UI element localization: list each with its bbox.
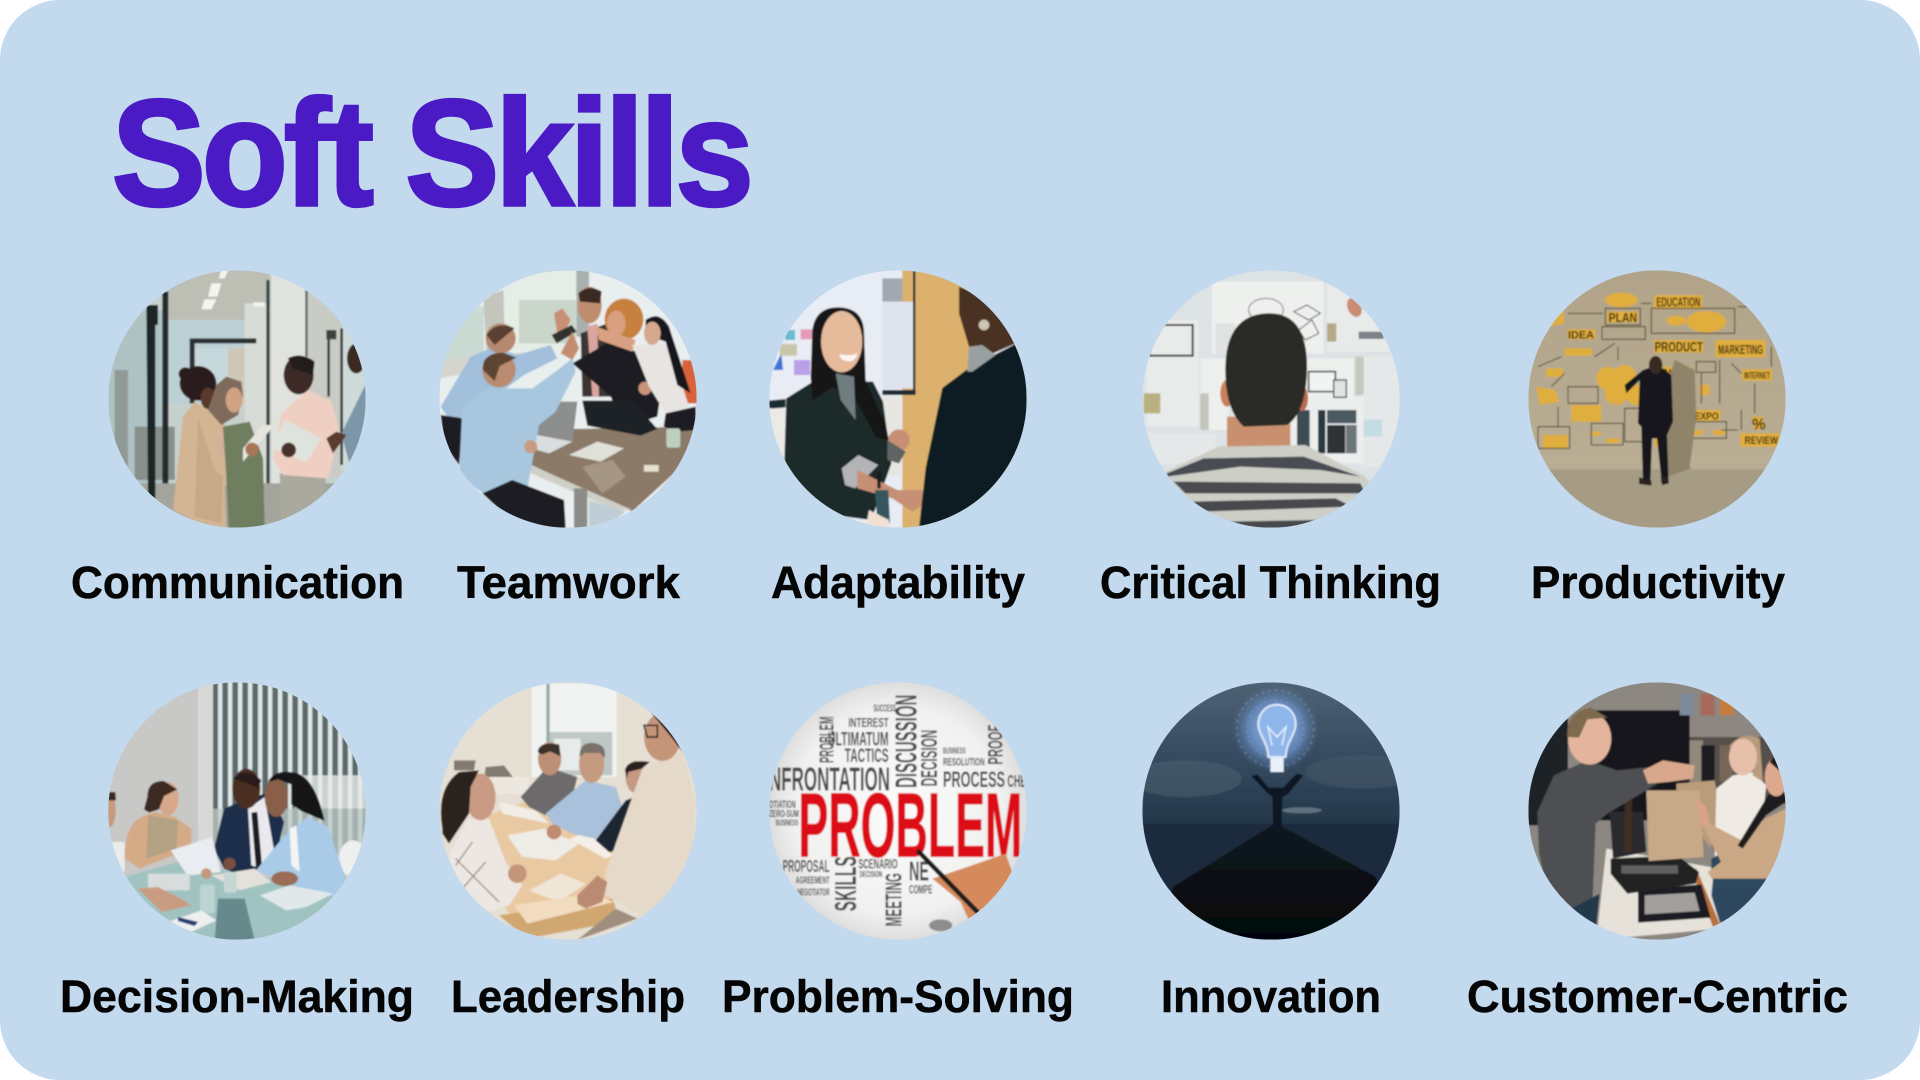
photo: word cloud around PROBLEM: RESOLUTION — [943, 756, 985, 768]
standing woman — [577, 712, 696, 940]
striped sweater — [1165, 444, 1369, 528]
photo: word cloud around PROBLEM: MEETING — [880, 873, 906, 926]
photo: man before sketched plan wall: EDUCATION — [1656, 295, 1700, 310]
photo: man before sketched plan wall: IDEA — [1568, 329, 1594, 341]
photo: word cloud around PROBLEM: NE — [909, 855, 929, 886]
photo: three colleagues at glass table — [104, 682, 367, 940]
man in blue shirt — [546, 743, 626, 840]
photo: shop assistant handing bag to customers — [1528, 682, 1788, 940]
photo: word cloud around PROBLEM: SUCCESS — [873, 703, 896, 714]
label: Innovation — [1161, 971, 1381, 1022]
photo: word cloud around PROBLEM: ZERO-SUM — [769, 809, 799, 820]
table — [516, 427, 697, 528]
photo: word cloud around PROBLEM: DECISION — [916, 730, 942, 786]
photo: word cloud around PROBLEM: NFRONTATION — [769, 761, 890, 798]
photo: word cloud around PROBLEM: BUSINESS — [943, 746, 966, 756]
label: Teamwork — [457, 557, 681, 608]
photo: man before sketched plan wall — [1528, 270, 1786, 528]
photo: word cloud around PROBLEM: PROCESS — [943, 767, 1005, 792]
photo: word cloud around PROBLEM: COMPE — [909, 883, 932, 897]
other person — [919, 287, 1027, 538]
seated woman — [441, 770, 527, 912]
photo: word cloud around PROBLEM: SCENARIO — [858, 856, 898, 872]
red haired woman — [572, 299, 661, 427]
skill: Adaptability — [769, 270, 1027, 608]
skill: Productivity — [1528, 270, 1786, 608]
head — [1220, 313, 1308, 450]
photo: word cloud around PROBLEM: INTEREST — [848, 715, 889, 730]
woman — [784, 306, 924, 528]
man in pink sweater — [273, 354, 340, 484]
title: Soft Skills — [112, 68, 750, 237]
woman in white blouse — [632, 316, 697, 432]
light bulb and network glow — [1231, 685, 1319, 773]
photo: man before sketched plan wall: MARKETING — [1718, 343, 1763, 357]
photo: word cloud around PROBLEM: PROBLEM — [798, 775, 1022, 876]
woman in dark top — [596, 761, 650, 852]
photo: man viewing wall of sketches — [1142, 270, 1400, 528]
man at right edge — [326, 343, 366, 463]
photo: man before sketched plan wall: REVIEW — [1745, 435, 1779, 447]
skill: Decision-Making — [60, 682, 414, 1022]
photo: word cloud around PROBLEM — [769, 682, 1027, 940]
skill: Customer-Centric — [1467, 682, 1848, 1022]
skill: Problem-Solving — [722, 682, 1074, 1022]
photo: word cloud around PROBLEM: NEGOTIATOR — [797, 887, 830, 898]
counter — [1596, 799, 1720, 940]
photo: man before sketched plan wall: % — [1752, 416, 1766, 433]
photo: word cloud around PROBLEM: ULTIMATUM — [828, 729, 889, 750]
skill: Communication — [71, 270, 404, 608]
photo: colleagues talking in office — [108, 270, 366, 528]
photo: word cloud around PROBLEM: AGREEMENT — [796, 876, 830, 887]
photo: word cloud around PROBLEM: SKILLS — [829, 856, 863, 911]
paper and props — [138, 837, 333, 932]
table — [486, 802, 616, 937]
woman in tan sweater — [1696, 755, 1788, 924]
photo: figure holding glowing light bulb — [1129, 682, 1419, 940]
photo: word cloud around PROBLEM: OTIATION — [769, 799, 796, 811]
skill: Innovation — [1129, 682, 1419, 1022]
photo: man before sketched plan wall: SALES — [1663, 366, 1686, 380]
photo: man before sketched plan wall: PLAN — [1609, 310, 1637, 325]
photo: woman shaking hands — [769, 270, 1027, 528]
photo: meeting with standing leader — [439, 682, 697, 940]
man in grey shirt — [521, 742, 577, 815]
laptops — [526, 401, 680, 462]
photo: word cloud around PROBLEM: PROBLEM — [815, 716, 838, 763]
photo: word cloud around PROBLEM: DISCUSSION — [890, 695, 924, 788]
woman in blue blazer — [255, 772, 346, 897]
glass table — [126, 862, 333, 940]
label: Adaptability — [771, 557, 1025, 608]
left edge person — [108, 791, 117, 828]
label: Customer-Centric — [1467, 971, 1848, 1022]
label: Problem-Solving — [722, 971, 1074, 1022]
hand with pen — [916, 849, 1014, 932]
label: Decision-Making — [60, 971, 414, 1022]
label: Productivity — [1531, 557, 1785, 608]
man in suit — [1625, 356, 1673, 486]
label: Leadership — [451, 971, 685, 1022]
label: Communication — [71, 557, 404, 608]
man in grey sweater — [1537, 708, 1695, 925]
photo: man before sketched plan wall: PRODUCT — [1655, 338, 1703, 354]
woman with paper — [125, 781, 191, 869]
skill: Teamwork — [439, 270, 697, 608]
paper bags — [1646, 780, 1723, 861]
shadow — [1666, 360, 1698, 476]
photo: man before sketched plan wall: INTERNET — [1744, 371, 1770, 381]
photo: word cloud around PROBLEM: DECISION — [860, 870, 882, 879]
photo: man before sketched plan wall: EXPO — [1695, 411, 1719, 422]
silhouette figure — [1251, 774, 1303, 834]
woman in white — [1711, 736, 1766, 872]
pier — [1149, 823, 1400, 940]
photo: team high five at a table — [439, 270, 697, 528]
skill: Critical Thinking — [1100, 270, 1441, 608]
photo: word cloud around PROBLEM: TACTICS — [845, 746, 889, 767]
rear man — [441, 323, 557, 465]
woman in tan jacket — [172, 365, 228, 528]
standing man — [552, 287, 619, 397]
man in suit — [214, 769, 284, 875]
skill: Leadership — [439, 682, 697, 1022]
photo: word cloud around PROBLEM: PROPOSAL — [783, 856, 830, 876]
photo: word cloud around PROBLEM: PROOF — [983, 725, 1007, 765]
photo: word cloud around PROBLEM: BUSINESS — [776, 817, 798, 827]
photo: word cloud around PROBLEM: CHE — [1007, 771, 1026, 791]
woman in hijab — [208, 377, 275, 528]
label: Critical Thinking — [1100, 557, 1441, 608]
seated man — [459, 332, 579, 528]
